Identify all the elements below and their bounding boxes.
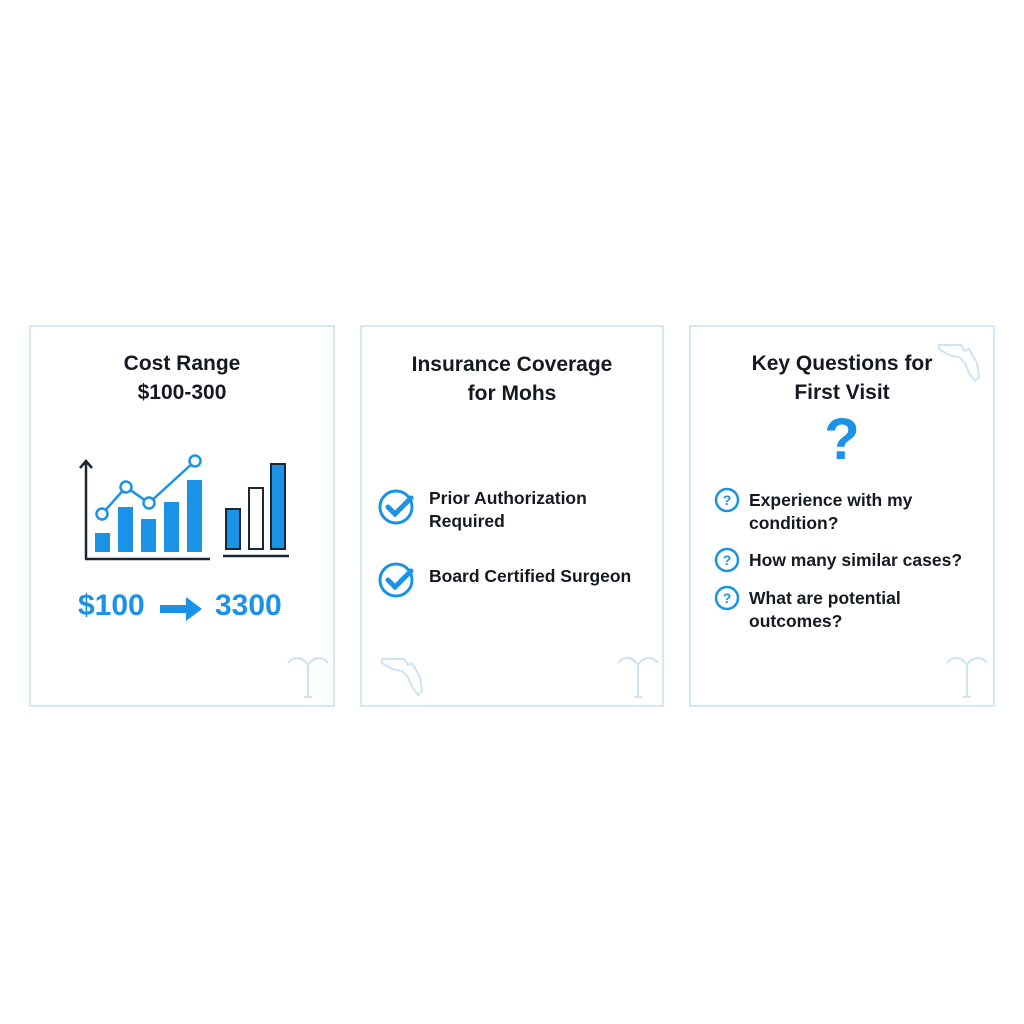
question 1 xyxy=(749,490,912,533)
item: prior authorization: Required xyxy=(429,511,505,531)
text: price to: 3300 xyxy=(215,589,282,622)
icon: big question mark: ? xyxy=(824,407,860,472)
icons: small question circles: ? xyxy=(723,492,731,508)
panel: insurance coverage xyxy=(360,325,664,707)
heading: insurance coverage xyxy=(412,353,612,405)
icon: check 1 xyxy=(378,490,414,524)
icon: palm tree xyxy=(946,657,988,698)
panel: cost range xyxy=(29,325,335,707)
heading: insurance coverage: Insurance Coverage xyxy=(412,353,612,376)
heading: key questions xyxy=(752,352,932,404)
text: price from: $100 xyxy=(78,589,145,622)
question 2: How many similar cases? xyxy=(749,550,962,570)
heading: cost range xyxy=(124,352,240,404)
icon: palm tree xyxy=(617,657,659,698)
icon: check 2 xyxy=(378,562,414,598)
arrow xyxy=(160,597,202,621)
icon: palm tree xyxy=(287,657,329,698)
chart: line and bar chart xyxy=(79,454,289,560)
item: prior authorization xyxy=(429,488,587,531)
heading: key questions: First Visit xyxy=(794,381,890,404)
question 3 xyxy=(749,588,901,631)
icons: small question circles: ? xyxy=(723,590,731,606)
item: prior authorization: Prior Authorization xyxy=(429,488,587,508)
heading: cost range: Cost Range xyxy=(124,352,240,375)
icon: florida xyxy=(381,658,423,696)
question 1: condition? xyxy=(749,513,838,533)
panel: key questions xyxy=(689,325,995,707)
heading: cost range: $100-300 xyxy=(138,381,226,404)
question 3: What are potential xyxy=(749,588,901,608)
question 1: Experience with my xyxy=(749,490,912,510)
item: board certified: Board Certified Surgeon xyxy=(429,566,631,586)
question list xyxy=(714,488,962,631)
heading: insurance coverage: for Mohs xyxy=(468,382,556,405)
heading: key questions: Key Questions for xyxy=(752,352,932,375)
question 3: outcomes? xyxy=(749,611,842,631)
icons: small question circles xyxy=(714,488,740,610)
icon: florida xyxy=(938,344,980,382)
icons: small question circles: ? xyxy=(723,552,731,568)
